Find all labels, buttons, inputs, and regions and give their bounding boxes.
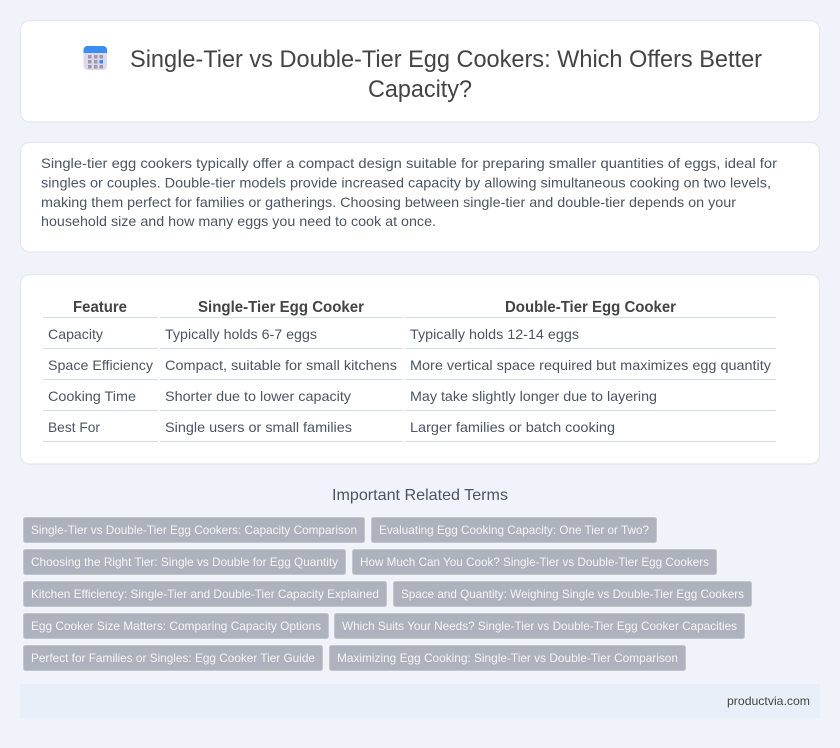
row: best for xyxy=(48,419,615,435)
tag: Evaluating Egg Cooking Capacity: One Tier or Two? xyxy=(379,523,649,537)
row: cooking time xyxy=(48,388,657,404)
intro text: household size and how many eggs you need to cook at once. xyxy=(41,213,436,229)
intro text: Single-tier egg cookers typically offer a compact design suitable for preparing smaller quantities of eggs, ideal for xyxy=(41,155,777,171)
row: space efficiency: More vertical space required but maximizes egg quantity xyxy=(410,357,771,373)
tag xyxy=(24,614,328,638)
row: cooking time: Shorter due to lower capacity xyxy=(165,388,351,404)
tag: Which Suits Your Needs? Single-Tier vs Double-Tier Egg Cooker Capacities xyxy=(342,619,737,633)
row: space efficiency xyxy=(48,357,771,373)
tag xyxy=(352,550,716,574)
tag: Kitchen Efficiency: Single-Tier and Double-Tier Capacity Explained xyxy=(31,587,379,601)
tag xyxy=(334,614,744,638)
header panel xyxy=(20,20,820,122)
table header: Feature xyxy=(73,299,127,316)
row: space efficiency: Space Efficiency xyxy=(48,357,153,373)
row: best for: Single users or small families xyxy=(165,419,352,435)
table header: Double-Tier Egg Cooker xyxy=(505,299,676,316)
title: Capacity? xyxy=(368,76,472,103)
table header: Single-Tier Egg Cooker xyxy=(198,299,364,316)
row: cooking time: May take slightly longer due to layering xyxy=(410,388,657,404)
related terms tags xyxy=(24,518,752,670)
table header xyxy=(73,299,676,316)
intro text: singles or couples. Double-tier models provide increased capacity by allowing simultaneous cooking on two levels, xyxy=(41,174,771,190)
tag xyxy=(24,582,386,606)
tag: Single-Tier vs Double-Tier Egg Cookers: Capacity Comparison xyxy=(31,523,357,537)
row: capacity: Capacity xyxy=(48,326,103,342)
tag: Maximizing Egg Cooking: Single-Tier vs Double-Tier Comparison xyxy=(337,651,678,665)
row: space efficiency: Compact, suitable for small kitchens xyxy=(165,357,397,373)
intro text: making them perfect for families or gatherings. Choosing between single-tier and double-tier depends on your xyxy=(41,194,736,210)
title: Single-Tier vs Double-Tier Egg Cookers: Which Offers Better xyxy=(130,46,762,73)
tag xyxy=(24,518,364,542)
panel: comparison table xyxy=(20,274,820,464)
tag xyxy=(330,646,686,670)
tag: Egg Cooker Size Matters: Comparing Capacity Options xyxy=(31,619,321,633)
icon: calendar xyxy=(84,46,107,70)
footer xyxy=(20,684,820,718)
row: cooking time: Cooking Time xyxy=(48,388,136,404)
tag xyxy=(372,518,656,542)
heading: related terms: Important Related Terms xyxy=(332,487,508,504)
tag xyxy=(394,582,752,606)
row: best for: Best For xyxy=(48,419,100,435)
intro text xyxy=(41,155,777,229)
row: capacity: Typically holds 6-7 eggs xyxy=(165,326,317,342)
tag xyxy=(24,646,322,670)
panel: introduction xyxy=(20,142,820,252)
tag: Choosing the Right Tier: Single vs Double for Egg Quantity xyxy=(31,555,338,569)
tag: Space and Quantity: Weighing Single vs Double-Tier Egg Cookers xyxy=(401,587,744,601)
tag: How Much Can You Cook? Single-Tier vs Double-Tier Egg Cookers xyxy=(360,555,709,569)
tag: Perfect for Families or Singles: Egg Cooker Tier Guide xyxy=(31,651,315,665)
row: capacity: Typically holds 12-14 eggs xyxy=(410,326,579,342)
tag xyxy=(24,550,346,574)
footer: productvia.com xyxy=(727,694,810,708)
title xyxy=(130,46,762,103)
row: best for: Larger families or batch cooking xyxy=(410,419,615,435)
row: capacity xyxy=(48,326,579,342)
